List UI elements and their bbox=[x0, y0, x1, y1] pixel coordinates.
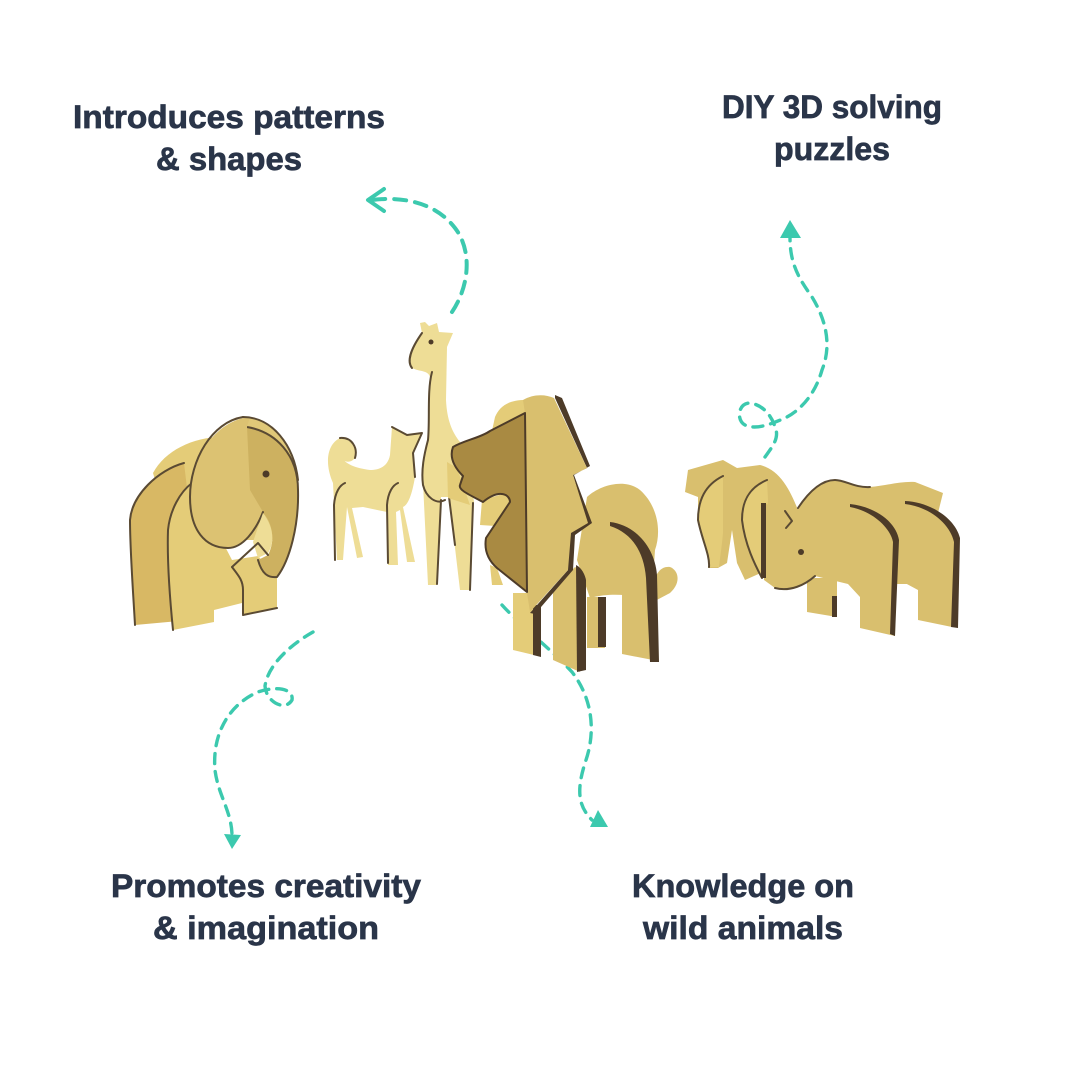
lion legs bbox=[513, 593, 534, 655]
heading: DIY 3D solving puzzles bbox=[722, 89, 942, 167]
arrow: to DIY puzzles bbox=[739, 220, 827, 457]
arrow: to introduces patterns bbox=[368, 189, 467, 312]
arrow: to promotes creativity bbox=[215, 632, 313, 849]
trunk tip bbox=[253, 513, 272, 558]
illustration: elephant bbox=[130, 417, 298, 630]
lion mane bbox=[523, 395, 588, 612]
heading: DIY 3D solving puzzles: puzzles bbox=[774, 131, 890, 167]
lion mane edge bbox=[530, 395, 592, 614]
giraffe eye bbox=[428, 340, 434, 344]
heading: promotes creativity bbox=[111, 868, 421, 946]
lion body bbox=[577, 484, 658, 598]
heading: knowledge on wild animals: wild animals bbox=[642, 910, 843, 946]
illustration: rhino bbox=[761, 480, 960, 636]
heading: DIY 3D solving puzzles: DIY 3D solving bbox=[722, 89, 942, 125]
left slab bbox=[130, 463, 192, 625]
arrow: to wild animals bbox=[502, 605, 608, 827]
illustration: giraffe bbox=[410, 322, 474, 590]
right ear panel and trunk bbox=[240, 427, 298, 577]
rhino panel 3 bbox=[905, 502, 955, 627]
heading: introduces patterns bbox=[73, 99, 385, 177]
heading: introduces patterns: & shapes bbox=[156, 141, 302, 177]
illustration: dog bbox=[328, 427, 422, 565]
illustration: bear bbox=[685, 460, 798, 580]
second slab bbox=[168, 483, 277, 630]
elephant eye bbox=[262, 470, 270, 478]
heading: knowledge on wild animals: Knowledge on bbox=[632, 868, 854, 904]
lion back pieces bbox=[490, 400, 525, 440]
rhino panel 2 bbox=[848, 505, 897, 636]
heading: introduces patterns: Introduces patterns bbox=[73, 99, 385, 135]
heading: knowledge on wild animals bbox=[632, 868, 854, 946]
left ear bbox=[190, 417, 263, 548]
illustration: lion bbox=[452, 395, 678, 672]
heading: promotes creativity: & imagination bbox=[153, 910, 379, 946]
heading: promotes creativity: Promotes creativity bbox=[111, 868, 421, 904]
lion face bbox=[452, 413, 527, 592]
